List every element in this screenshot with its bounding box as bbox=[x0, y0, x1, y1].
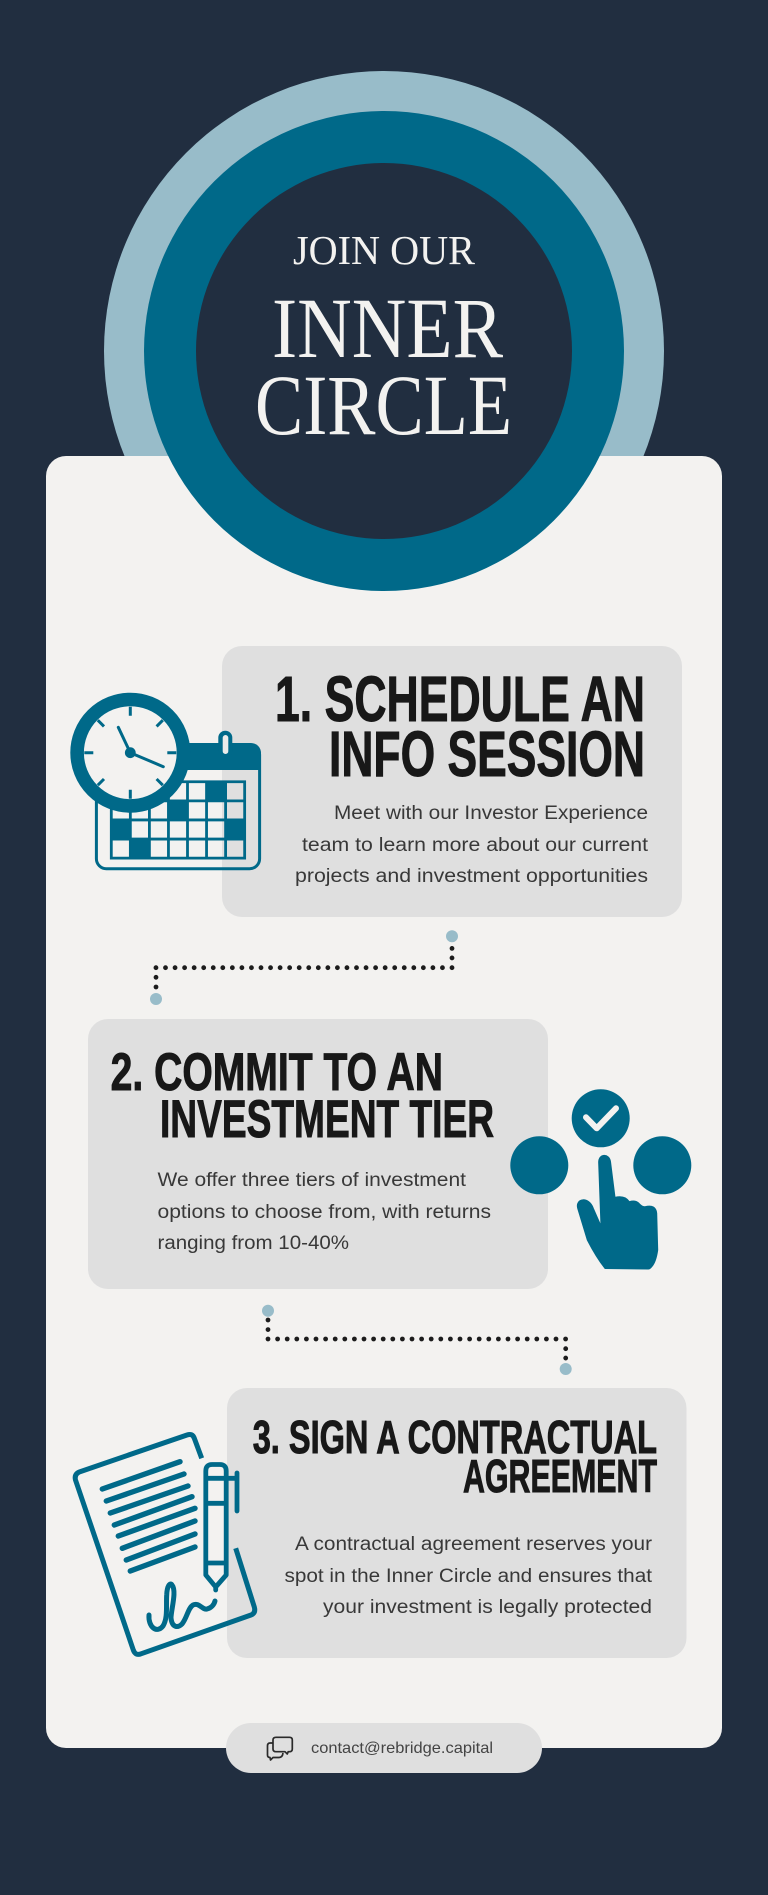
step 2 body text bbox=[158, 1170, 491, 1254]
step 1 body text: Meet with our Investor Experience bbox=[334, 803, 648, 824]
icon: hand selecting option bbox=[510, 1089, 691, 1269]
step 3 body text: your investment is legally protected bbox=[323, 1597, 652, 1618]
connector: step 2 to step 3 bbox=[262, 1305, 572, 1375]
step 3 body text bbox=[284, 1534, 653, 1618]
step 3 body text: spot in the Inner Circle and ensures that bbox=[284, 1566, 653, 1587]
icon: signed document and pen bbox=[75, 1434, 255, 1654]
title: JOIN OUR bbox=[293, 227, 476, 273]
panel: step 3 card bbox=[227, 1388, 686, 1658]
title: INNER bbox=[272, 280, 504, 376]
step 1 heading bbox=[275, 663, 645, 790]
step 1 body text: projects and investment opportunities bbox=[295, 866, 648, 887]
main content panel bbox=[46, 456, 722, 1748]
step 3 heading: AGREEMENT bbox=[463, 1450, 657, 1502]
step 2 heading: INVESTMENT TIER bbox=[160, 1090, 494, 1149]
title: CIRCLE bbox=[255, 357, 512, 453]
panel: step 1 card bbox=[222, 646, 682, 917]
step 2 heading bbox=[111, 1043, 494, 1149]
title bbox=[255, 227, 512, 453]
step 3 body text: A contractual agreement reserves your bbox=[295, 1534, 653, 1555]
outer light blue circle bbox=[104, 71, 664, 631]
contact email: contact@rebridge.capital bbox=[311, 1740, 493, 1757]
contact pill bbox=[226, 1723, 542, 1773]
teal ring and title badge bbox=[144, 111, 624, 591]
step 1 body text: team to learn more about our current bbox=[302, 835, 649, 856]
step 2 heading: 2. COMMIT TO AN bbox=[111, 1043, 443, 1102]
step 2 body text: options to choose from, with returns bbox=[158, 1202, 491, 1223]
step 2 body text: ranging from 10-40% bbox=[158, 1233, 349, 1254]
connector: step 1 to step 2 bbox=[150, 930, 458, 1005]
icon: chat bubbles bbox=[268, 1737, 292, 1760]
icon: calendar and clock bbox=[77, 700, 261, 869]
step 2 body text: We offer three tiers of investment bbox=[158, 1170, 467, 1191]
panel: step 2 card bbox=[88, 1019, 548, 1289]
step 3 heading bbox=[253, 1411, 657, 1502]
step 1 body text bbox=[295, 803, 649, 887]
